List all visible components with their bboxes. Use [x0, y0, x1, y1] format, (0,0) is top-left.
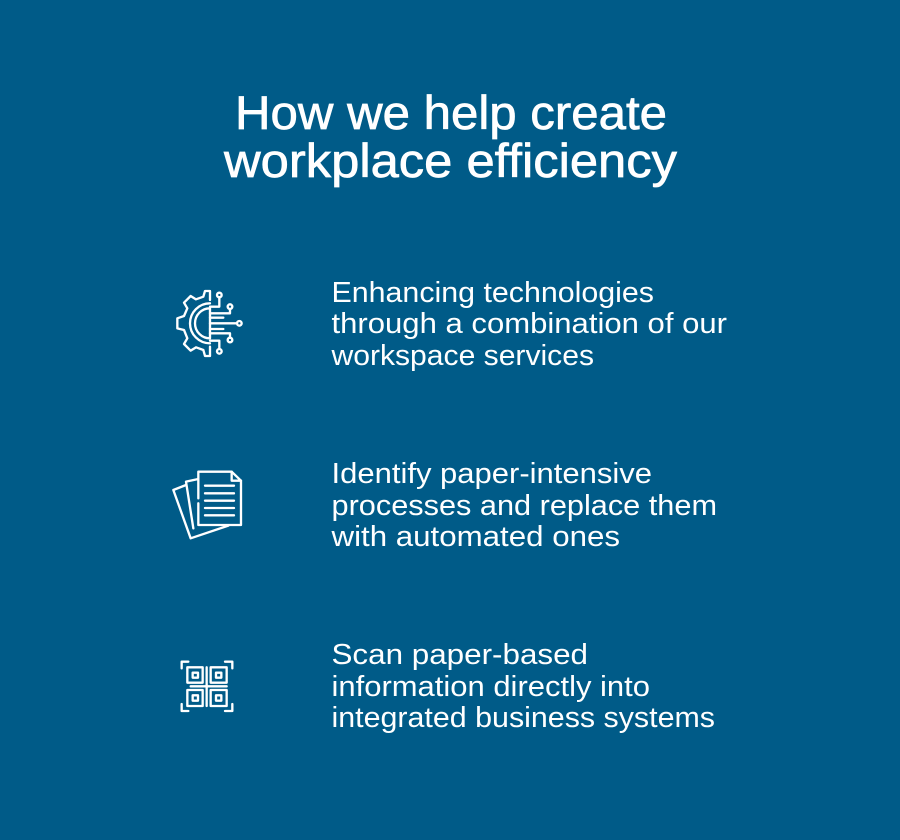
panel: paper processes — [173, 458, 717, 553]
icon: stack of documents — [173, 472, 241, 538]
text: scanning — [332, 639, 715, 734]
text: paper processes: with automated ones — [330, 521, 620, 553]
text: scanning: integrated business systems — [332, 702, 715, 734]
text: scanning: Scan paper-based — [332, 639, 588, 671]
panel: enhancing technologies — [177, 277, 727, 372]
icon: QR code scan — [182, 662, 232, 711]
text: enhancing technologies — [330, 277, 727, 372]
text: enhancing technologies: Enhancing technologies — [332, 277, 654, 309]
icon: gear with circuit lines — [177, 291, 242, 356]
text: enhancing technologies: through a combination of our — [332, 308, 727, 340]
text: paper processes: Identify paper-intensive — [332, 458, 652, 490]
text: enhancing technologies: workspace services — [330, 340, 594, 372]
title: How we help create — [235, 86, 667, 139]
text: paper processes: processes and replace them — [332, 490, 717, 522]
text: scanning: information directly into — [332, 671, 650, 703]
panel: scanning — [182, 639, 715, 734]
text: paper processes — [330, 458, 717, 553]
title: workplace efficiency — [223, 134, 678, 187]
title — [223, 86, 678, 187]
